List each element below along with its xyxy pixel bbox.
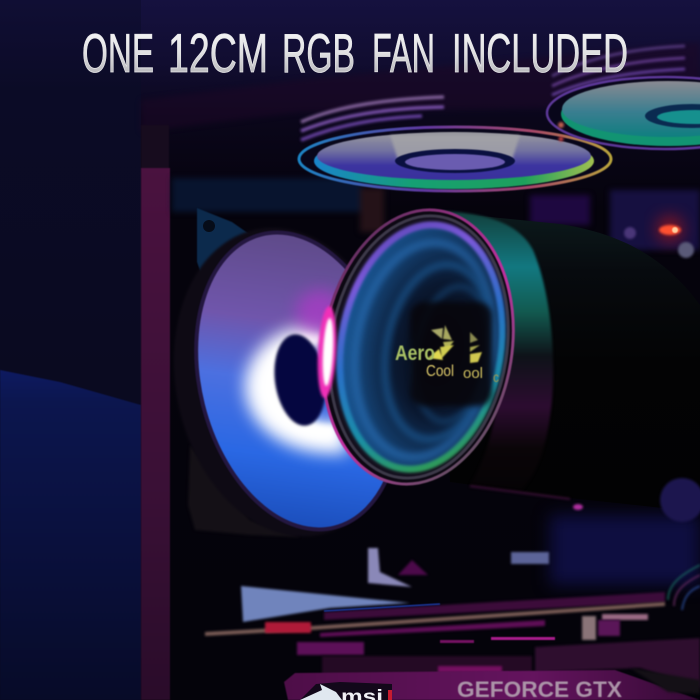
graphics card: [205, 592, 700, 700]
mirror inner ring 1: [340, 233, 508, 467]
logo fan mark: [428, 325, 454, 360]
light arcs: [301, 97, 444, 140]
heatsink left: [322, 656, 532, 678]
small connector right: [678, 242, 694, 258]
hub center: [657, 110, 700, 124]
hub light wedge: [390, 135, 520, 160]
board blue lower right: [550, 515, 700, 585]
mirror inner glass: [323, 213, 519, 481]
backplate bar: [324, 592, 665, 620]
white cable patch: [241, 586, 410, 622]
logo word aero: Aero: [395, 342, 435, 365]
cable bundle right: [668, 565, 700, 610]
red connector: [265, 622, 311, 633]
fan hub hole: [269, 331, 331, 429]
grey block 2: [602, 614, 648, 620]
magenta light bar 1: [491, 637, 555, 640]
left dark wall: [0, 0, 141, 700]
reflected logo word: ool: [463, 365, 483, 382]
heatsink glow: [438, 666, 502, 673]
fan blade disc: [166, 211, 430, 551]
fan disc: [317, 132, 591, 180]
hub ring: [645, 104, 700, 128]
small magenta tab: [297, 642, 364, 655]
red LED right: [657, 216, 683, 242]
magenta glow: [296, 290, 344, 334]
fan disc: [562, 81, 700, 137]
fan bracket bottom: [188, 445, 300, 537]
red LEDs between fans: [558, 122, 564, 142]
title word fan: FAN: [372, 22, 435, 84]
white bracket: [368, 548, 412, 587]
second reflected word: c: [493, 369, 499, 385]
white light ring: [248, 329, 345, 451]
mirror rim: [304, 196, 532, 498]
magenta light bar 2: [440, 640, 474, 643]
dark logo plate: [410, 302, 492, 406]
white light core: [262, 334, 335, 439]
blue panel lower left: [0, 370, 141, 700]
red LED core: [659, 225, 681, 235]
motherboard label: [511, 552, 549, 564]
shroud: [284, 670, 700, 700]
motherboard panels behind: [172, 178, 700, 250]
logo word cool: Cool: [426, 363, 454, 380]
bracket screw hole: [203, 220, 215, 232]
red logo mark: [388, 690, 392, 700]
purple knob: [624, 227, 636, 239]
title word one: ONE: [82, 22, 154, 84]
pump cylinder body: [440, 212, 700, 512]
case pillar: [141, 168, 170, 700]
case corner dark: [141, 125, 169, 169]
title word 12cm: 12CM: [168, 22, 268, 84]
shroud dark wedge: [630, 668, 700, 694]
top fan one: [299, 97, 611, 191]
beige rail: [205, 602, 665, 636]
msi logo plate: [300, 682, 392, 700]
pump lower edge glow: [470, 486, 570, 499]
mirror dark edge: [311, 203, 527, 491]
green rim: [314, 133, 594, 189]
red LED glow: [657, 216, 683, 242]
title: [82, 22, 628, 84]
blue edge: [324, 604, 440, 611]
heatsink right: [535, 638, 700, 688]
pump metal band: [440, 211, 553, 490]
magenta small light: [573, 504, 583, 510]
msi dragon: [300, 684, 342, 700]
rim: [561, 82, 700, 146]
outer ring: [299, 127, 611, 191]
blue round fitting: [660, 478, 700, 522]
magenta bar: [320, 620, 545, 637]
magenta tab: [398, 560, 428, 575]
grey block 1: [582, 616, 596, 640]
reflected logo mark: [470, 332, 482, 363]
mirror inner ring 3: [406, 281, 498, 427]
hub center: [405, 154, 505, 170]
LED hot spot: [672, 227, 678, 233]
hub ring: [395, 149, 515, 173]
fan frame: [146, 206, 430, 558]
pump infinity mirror: [304, 196, 532, 498]
light arcs: [552, 46, 685, 95]
top fan two: [547, 46, 700, 149]
RGB fan: [166, 211, 430, 551]
case top frame: [141, 42, 700, 132]
purple block: [598, 620, 620, 636]
fan bracket top: [197, 208, 252, 285]
title word rgb: RGB: [282, 22, 355, 84]
mirror inner ring 2: [373, 257, 503, 447]
outer ring: [547, 77, 700, 149]
magenta hot spot glow: [316, 306, 338, 398]
white hot spot: [321, 318, 335, 386]
